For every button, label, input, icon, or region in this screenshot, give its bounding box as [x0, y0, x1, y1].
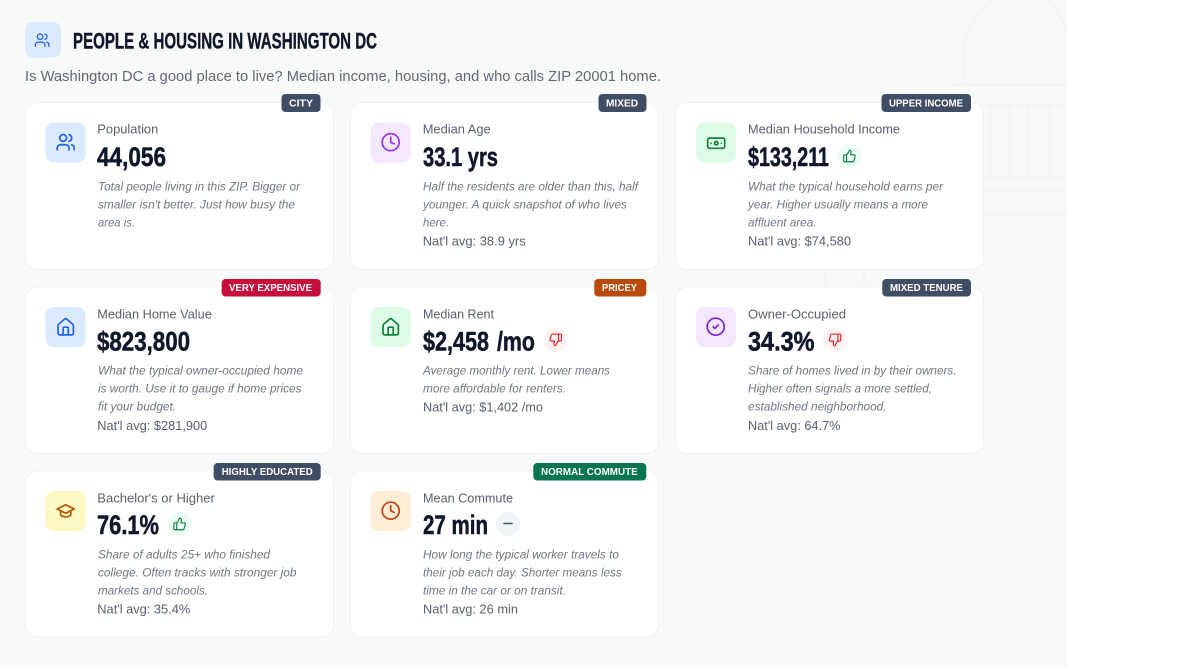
description [422, 364, 610, 396]
badge: mixed: MIXED [606, 98, 638, 110]
badge: normal commute: NORMAL COMMUTE [541, 467, 638, 478]
national average: Nat'l avg: $281,900 [97, 418, 207, 433]
description: time in the car or on transit. [423, 584, 566, 598]
label: Median Household Income [748, 122, 900, 136]
badge: highly educated [214, 463, 321, 480]
description: is worth. Use it to gauge if home prices [98, 382, 302, 396]
description [423, 548, 622, 598]
description: established neighborhood. [748, 400, 886, 414]
label: Median Home Value [97, 306, 212, 321]
description: here. [423, 216, 449, 230]
description: Share of adults 25+ who finished [98, 548, 270, 562]
icon: check circle [696, 307, 736, 347]
description: What the typical household earns per [748, 180, 944, 194]
national average: Nat'l avg: 26 min [423, 602, 518, 616]
description: younger. A quick snapshot of who lives [422, 198, 627, 212]
description: fit your budget. [98, 400, 176, 414]
description: year. Higher usually means a more [747, 198, 928, 212]
label: Median Rent [423, 306, 494, 321]
panel: median home value [26, 279, 334, 454]
description: college. Often tracks with stronger job [98, 566, 297, 580]
badge: mixed tenure [882, 279, 971, 296]
national average: Nat'l avg: 38.9 yrs [423, 234, 526, 248]
title: PEOPLE & HOUSING IN WASHINGTON DC [73, 28, 377, 54]
icon: people [46, 122, 86, 162]
icon: clock [371, 122, 411, 162]
description [422, 180, 640, 230]
icon: thumbs up [168, 512, 192, 536]
value: $2,458 [423, 326, 489, 356]
icon: thumbs up [838, 144, 862, 168]
panel: median rent [350, 279, 658, 454]
value: $823,800 [97, 326, 190, 356]
subtitle: Is Washington DC a good place to live? Median income, housing, and who calls ZIP 20001 home. [25, 69, 661, 85]
description [748, 364, 956, 414]
value: /mo [497, 326, 535, 356]
panel: median household income [676, 94, 984, 270]
national average: Nat'l avg: 35.4% [97, 602, 191, 616]
label: Mean Commute [423, 490, 513, 505]
national average: Nat'l avg: $74,580 [748, 234, 851, 248]
description: markets and schools. [98, 584, 208, 598]
badge: highly educated: HIGHLY EDUCATED [222, 467, 313, 478]
badge: city [282, 94, 320, 112]
description: affluent area. [748, 216, 816, 230]
icon: graduation cap [46, 491, 86, 531]
value: 34.3% [748, 326, 814, 356]
icon: clock [371, 491, 411, 531]
icon: home [46, 307, 86, 347]
icon: thumbs down [544, 328, 568, 352]
description: their job each day. Shorter means less [423, 566, 622, 580]
panel: mean commute [350, 463, 658, 637]
national average: Nat'l avg: $1,402 /mo [423, 399, 543, 414]
value: 44,056 [97, 142, 166, 172]
description: Higher often signals a more settled, [748, 382, 932, 396]
panel: bachelor's or higher [26, 463, 334, 637]
badge: upper income [882, 94, 971, 112]
badge: mixed [598, 94, 646, 112]
badge: very expensive [222, 279, 321, 296]
icon: thumbs down [823, 328, 847, 352]
description: Half the residents are older than this, half [423, 180, 640, 194]
description: area is. [98, 216, 135, 230]
description [747, 180, 944, 230]
header icon [25, 22, 61, 58]
label: Population [97, 122, 158, 136]
icon: banknote [696, 122, 736, 162]
value: $133,211 [748, 142, 829, 172]
badge: upper income: UPPER INCOME [889, 98, 963, 110]
description: Average monthly rent. Lower means [422, 364, 610, 378]
description [98, 548, 297, 598]
description [98, 364, 303, 414]
panel: owner-occupied [676, 279, 984, 454]
description: smaller isn't better. Just how busy the [98, 198, 295, 212]
icon: neutral dash [496, 512, 520, 536]
badge: mixed tenure: MIXED TENURE [890, 283, 963, 294]
badge: pricey [594, 279, 646, 296]
panel: median age [350, 94, 658, 270]
badge: normal commute [533, 463, 646, 480]
description: What the typical owner-occupied home [98, 364, 303, 378]
description [98, 180, 301, 230]
description: Total people living in this ZIP. Bigger or [98, 180, 301, 194]
value: 33.1 yrs [423, 142, 498, 172]
badge: pricey: PRICEY [602, 283, 637, 294]
value: 27 min [423, 510, 488, 540]
badge: very expensive: VERY EXPENSIVE [229, 283, 312, 294]
icon: home [371, 307, 411, 347]
badge: city: CITY [289, 98, 313, 110]
national average: Nat'l avg: 64.7% [748, 418, 841, 433]
label: Owner-Occupied [748, 306, 846, 321]
description: Share of homes lived in by their owners. [748, 364, 956, 378]
description: more affordable for renters. [423, 382, 566, 396]
panel: population [26, 94, 334, 270]
value: 76.1% [97, 510, 159, 540]
description: How long the typical worker travels to [423, 548, 619, 562]
label: Median Age [423, 122, 491, 136]
label: Bachelor's or Higher [97, 490, 215, 505]
